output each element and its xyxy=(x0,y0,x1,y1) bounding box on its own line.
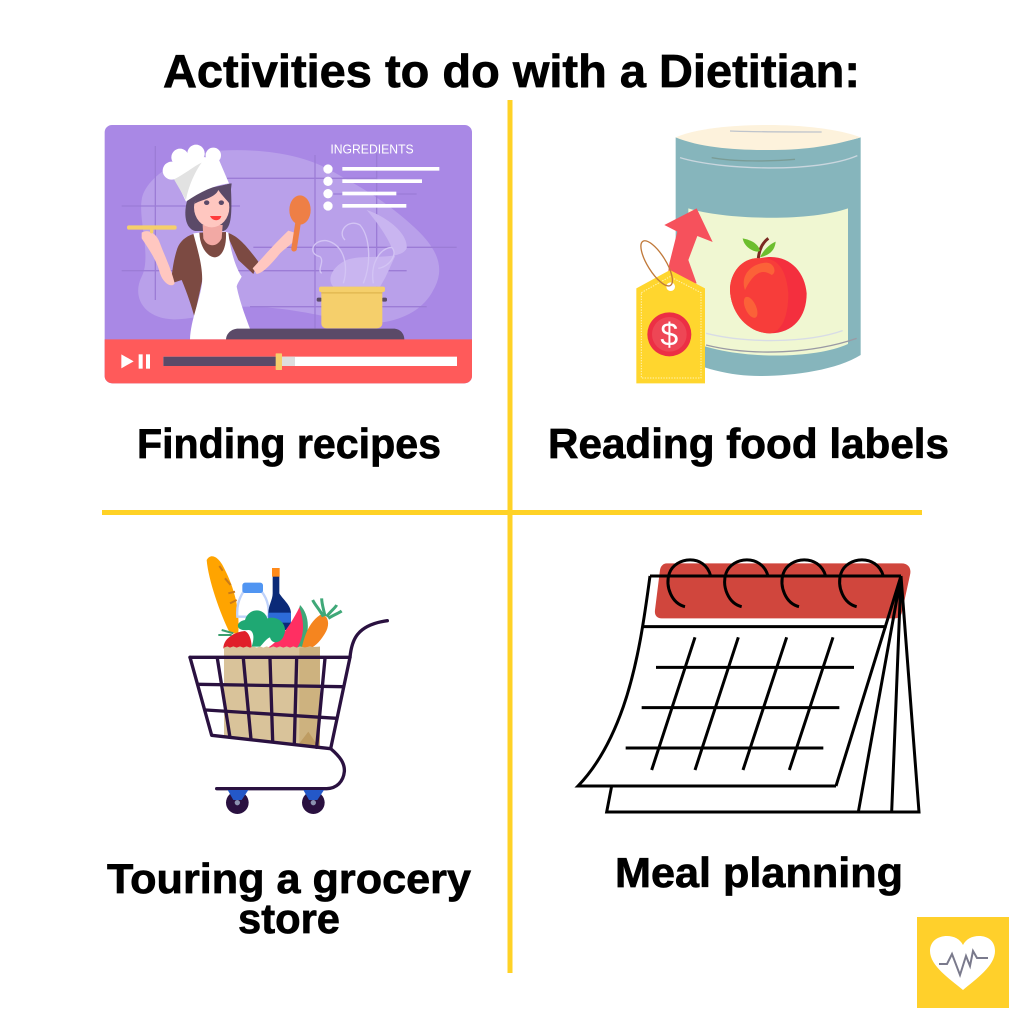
panel: meal planning xyxy=(578,560,919,896)
text: ingredients: INGREDIENTS xyxy=(330,142,414,156)
icon: calendar xyxy=(578,560,919,812)
illustration: pot on stove xyxy=(226,287,404,340)
label panel xyxy=(688,208,848,356)
red header band xyxy=(655,563,910,618)
divider: vertical xyxy=(508,100,512,973)
icon: grocery cart xyxy=(190,556,387,814)
panel: finding recipes xyxy=(105,125,472,467)
video controls bar xyxy=(105,339,472,383)
arrow xyxy=(664,208,713,283)
apple xyxy=(730,238,807,333)
label: touring a grocery store xyxy=(107,855,472,942)
panel: reading food labels xyxy=(548,125,949,467)
price tag xyxy=(636,270,705,383)
logo: heart badge xyxy=(917,917,1009,1008)
groceries xyxy=(207,556,342,649)
paper bag xyxy=(224,646,320,747)
panel: touring a grocery store xyxy=(107,556,472,942)
calendar lines xyxy=(578,560,919,812)
illustration: chef xyxy=(127,145,311,339)
icon: food can with price tag xyxy=(635,125,861,383)
label: touring a grocery store: Touring a grocery xyxy=(107,855,472,902)
label: meal planning: Meal planning xyxy=(615,849,903,896)
divider: horizontal xyxy=(102,510,922,515)
text: dollar sign: $ xyxy=(660,317,678,353)
title: Activities to do with a Dietitian: xyxy=(163,45,860,97)
icon: cooking video player xyxy=(105,125,472,383)
label: touring a grocery store: store xyxy=(238,895,340,942)
cart frame xyxy=(190,621,387,789)
wheels xyxy=(226,790,325,814)
label: reading food labels: Reading food labels xyxy=(548,420,949,467)
label: finding recipes: Finding recipes xyxy=(137,420,441,467)
can body xyxy=(676,137,861,376)
